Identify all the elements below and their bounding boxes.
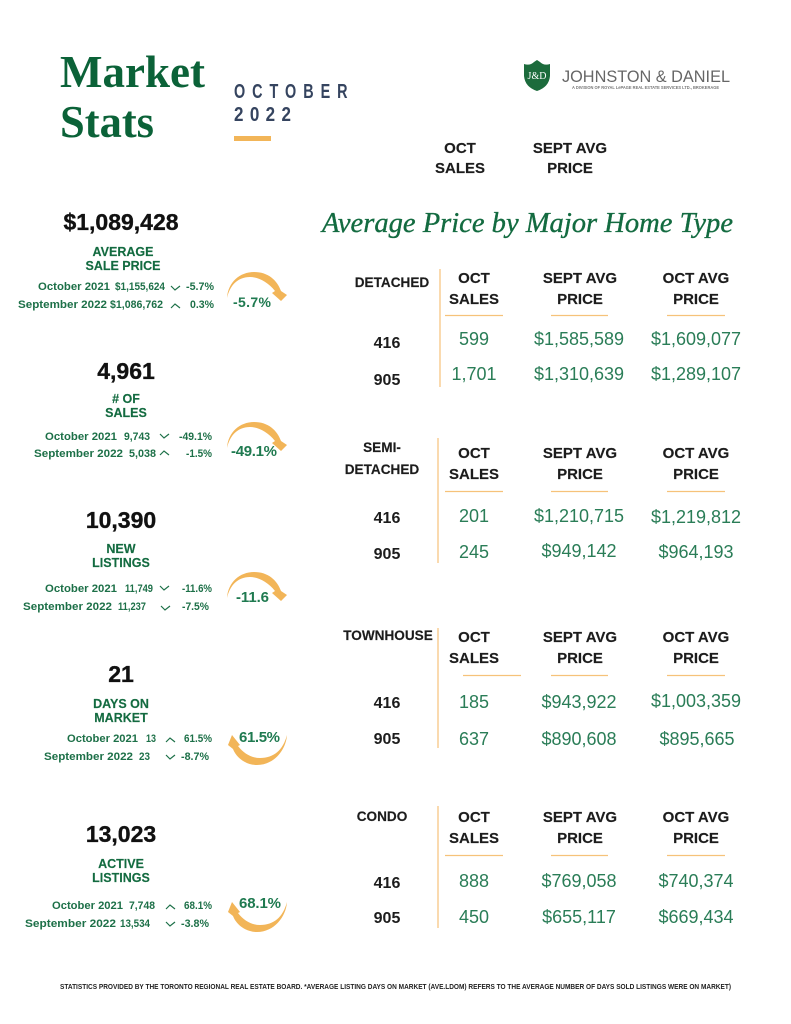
panel: average sale price: September 2022 (18, 299, 107, 311)
table: condo: SALES (449, 830, 499, 847)
panel: days on market: 23 (139, 751, 150, 763)
table: semi-detached: DETACHED (345, 462, 419, 477)
table: detached: 905 (374, 372, 400, 389)
table: semi-detached: 416 (374, 510, 400, 527)
arrow: down (227, 272, 287, 301)
date heading: OCTOBER (234, 80, 355, 103)
stray column headers: OCT (444, 140, 476, 157)
panel: active listings: 68.1% (184, 900, 212, 912)
table: townhouse: $895,665 (659, 729, 735, 749)
panel: average sale price (18, 209, 287, 311)
footer note: STATISTICS PROVIDED BY THE TORONTO REGIONAL REAL ESTATE BOARD. *AVERAGE LISTING DAYS ON MARKET (AVE.LDOM) REFERS TO THE AVERAGE NUMBER OF DAYS SOLD LISTINGS WERE ON MARKET) (60, 982, 732, 991)
table: townhouse: 905 (374, 731, 400, 748)
table: condo: PRICE (673, 830, 719, 847)
table: detached: SALES (449, 291, 499, 308)
table: semi-detached: 905 (374, 546, 400, 563)
table: detached: DETACHED (355, 275, 429, 290)
table: townhouse (343, 628, 741, 749)
stray column headers: PRICE (547, 160, 593, 177)
table: condo: $669,434 (658, 907, 734, 927)
table heading: Average Price by Major Home Type (320, 207, 733, 239)
panel: number of sales: # OF (112, 392, 140, 406)
logo: A DIVISION OF ROYAL LePAGE REAL ESTATE SERVICES LTD., BROKERAGE (572, 85, 719, 90)
panel: number of sales: October 2021 (45, 431, 117, 443)
panel: number of sales: 4,961 (97, 358, 155, 384)
panel: average sale price: 0.3% (190, 299, 214, 311)
table: condo: 888 (459, 871, 489, 891)
arrow: down (227, 422, 287, 451)
panel: days on market: 13 (146, 733, 156, 745)
table: detached: $1,585,589 (534, 329, 624, 349)
table: semi-detached: PRICE (673, 466, 719, 483)
table: detached: $1,289,107 (651, 364, 741, 384)
table: detached: SEPT AVG (543, 270, 617, 287)
title: Stats (60, 96, 154, 147)
panel: days on market: -8.7% (181, 751, 209, 763)
panel: number of sales: 5,038 (129, 448, 156, 460)
arrow: up (228, 902, 287, 932)
table: townhouse: OCT AVG (663, 629, 729, 646)
logo: JOHNSTON & DANIEL (562, 67, 730, 86)
panel: new listings: -11.6 (236, 589, 269, 606)
panel: active listings: -3.8% (181, 918, 209, 930)
panel: days on market: 61.5% (184, 733, 212, 745)
table: detached: 416 (374, 335, 400, 352)
panel: average sale price: -5.7% (233, 294, 272, 310)
table: semi-detached: $949,142 (541, 541, 617, 561)
table: semi-detached: OCT AVG (663, 445, 729, 462)
table: detached: OCT (458, 270, 490, 287)
table: condo: $769,058 (541, 871, 617, 891)
panel: number of sales: 9,743 (124, 431, 150, 443)
table: condo: OCT (458, 809, 490, 826)
table: semi-detached: 201 (459, 506, 489, 526)
panel: new listings: LISTINGS (92, 556, 150, 570)
date heading (234, 80, 355, 141)
table: semi-detached: $964,193 (658, 542, 734, 562)
panel: active listings: 68.1% (239, 895, 281, 912)
panel: active listings: 7,748 (129, 900, 155, 912)
panel: new listings: 10,390 (86, 507, 156, 533)
table: townhouse: 637 (459, 729, 489, 749)
table: detached (355, 269, 741, 389)
stray column headers: SALES (435, 160, 485, 177)
panel: average sale price: $1,089,428 (63, 209, 179, 235)
table: townhouse: SEPT AVG (543, 629, 617, 646)
table: townhouse: TOWNHOUSE (343, 628, 433, 643)
table: detached: $1,609,077 (651, 329, 741, 349)
table: condo: 905 (374, 910, 400, 927)
table: detached: 599 (459, 329, 489, 349)
panel: new listings: -7.5% (182, 601, 209, 613)
table: condo: OCT AVG (663, 809, 729, 826)
table: semi-detached: SEMI- (363, 440, 401, 455)
table: townhouse: 416 (374, 695, 400, 712)
date heading: 2022 (234, 103, 297, 125)
table: semi-detached: OCT (458, 445, 490, 462)
table: semi-detached (345, 438, 741, 563)
panel: average sale price: AVERAGE (93, 245, 153, 259)
stray column headers (435, 140, 607, 177)
table: semi-detached: $1,219,812 (651, 507, 741, 527)
panel: days on market: DAYS ON (93, 697, 149, 711)
arrow: down (227, 572, 287, 601)
table: townhouse: SALES (449, 650, 499, 667)
panel: new listings: 11,237 (118, 601, 146, 613)
panel: active listings (25, 821, 287, 932)
panel: active listings: 13,023 (86, 821, 156, 847)
table: townhouse: PRICE (557, 650, 603, 667)
panel: number of sales: -49.1% (179, 431, 212, 443)
panel: active listings: 13,534 (120, 918, 151, 930)
panel: number of sales: -49.1% (231, 443, 277, 460)
panel: average sale price: October 2021 (38, 281, 110, 293)
table: townhouse: PRICE (673, 650, 719, 667)
table: semi-detached: 245 (459, 542, 489, 562)
panel: new listings: -11.6% (182, 583, 212, 595)
table: detached: PRICE (557, 291, 603, 308)
panel: number of sales: SALES (105, 406, 147, 420)
panel: new listings: September 2022 (23, 601, 112, 613)
panel: days on market: MARKET (94, 711, 148, 725)
panel: average sale price: SALE PRICE (85, 259, 161, 273)
table: semi-detached: PRICE (557, 466, 603, 483)
table: semi-detached: $1,210,715 (534, 506, 624, 526)
table: condo: SEPT AVG (543, 809, 617, 826)
panel: average sale price: -5.7% (186, 281, 214, 293)
panel: average sale price: $1,155,624 (115, 281, 166, 293)
panel: number of sales: September 2022 (34, 448, 123, 460)
table: townhouse: OCT (458, 629, 490, 646)
panel: number of sales: -1.5% (186, 448, 212, 460)
panel: days on market (44, 661, 287, 765)
table: condo: $740,374 (658, 871, 734, 891)
arrow: up (228, 735, 287, 765)
table: detached: OCT AVG (663, 270, 729, 287)
panel: days on market: October 2021 (67, 733, 138, 745)
panel: active listings: LISTINGS (92, 871, 150, 885)
stray column headers: SEPT AVG (533, 140, 607, 157)
table: townhouse: $943,922 (541, 692, 617, 712)
table: semi-detached: SEPT AVG (543, 445, 617, 462)
panel: new listings (23, 507, 287, 613)
table: condo: 450 (459, 907, 489, 927)
table: townhouse: $1,003,359 (651, 691, 741, 711)
table: detached: PRICE (673, 291, 719, 308)
table: townhouse: 185 (459, 692, 489, 712)
table: condo: PRICE (557, 830, 603, 847)
table: semi-detached: SALES (449, 466, 499, 483)
logo: J&D (528, 71, 546, 82)
table: condo: 416 (374, 875, 400, 892)
panel: active listings: October 2021 (52, 900, 123, 912)
panel: active listings: September 2022 (25, 918, 116, 930)
table: condo (357, 806, 734, 928)
table: condo: $655,117 (542, 907, 616, 927)
panel: days on market: September 2022 (44, 751, 133, 763)
title: Market (60, 46, 206, 97)
logo (524, 60, 730, 91)
title (60, 46, 206, 147)
table: condo: CONDO (357, 809, 407, 824)
panel: active listings: ACTIVE (98, 857, 144, 871)
table: detached: 1,701 (451, 364, 497, 384)
panel: average sale price: $1,086,762 (110, 299, 163, 311)
panel: new listings: NEW (106, 542, 136, 556)
panel: new listings: 11,749 (125, 583, 153, 595)
table: detached: $1,310,639 (534, 364, 624, 384)
panel: days on market: 21 (108, 661, 134, 687)
panel: number of sales (34, 358, 287, 460)
panel: days on market: 61.5% (239, 729, 280, 746)
table: townhouse: $890,608 (541, 729, 617, 749)
panel: new listings: October 2021 (45, 583, 117, 595)
